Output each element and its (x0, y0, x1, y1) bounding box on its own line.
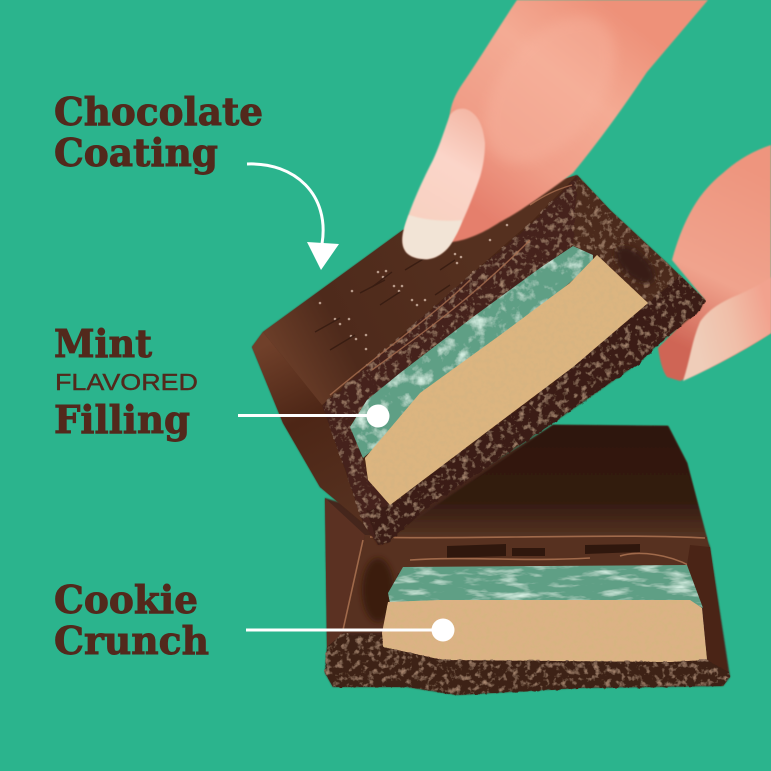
lower bar silhouette (325, 425, 730, 695)
upper bar mint filling (350, 246, 593, 458)
lower bar dark cavities (447, 544, 640, 558)
label: mint flavored filling (54, 321, 198, 442)
pointer: cookie crunch (246, 618, 454, 642)
lower bar side face (325, 498, 365, 647)
label: cookie crunch: Cookie (54, 577, 198, 622)
embossed leaf marks (315, 258, 455, 350)
label: cookie crunch (54, 577, 209, 663)
upper bar right corner (573, 175, 705, 303)
upper bar silhouette (252, 175, 705, 545)
label: cookie crunch: Crunch (54, 618, 209, 663)
nail white tip (403, 215, 462, 259)
upper bar side face (252, 332, 363, 523)
top fingernail (403, 109, 485, 259)
pointer: mint filling (238, 404, 390, 428)
embossed dots pattern (319, 224, 508, 350)
photo: upper chocolate bar (252, 175, 705, 545)
lower bar rim (343, 535, 712, 633)
label: chocolate coating: Coating (54, 130, 218, 175)
upper bar crumb base (366, 275, 705, 545)
lower bar dark left shadow (362, 558, 394, 622)
upper bar rim (322, 175, 610, 423)
label: mint flavored filling: FLAVORED (55, 369, 198, 395)
lower bar top face (365, 425, 707, 538)
label: chocolate coating (54, 89, 263, 175)
lower bar rim highlights (343, 536, 705, 630)
lower bar right coating (687, 545, 728, 677)
arrow: chocolate coating (247, 164, 339, 270)
lower bar crumb base (325, 634, 730, 695)
upper bar cookie layer (365, 255, 648, 505)
label: mint flavored filling: Filling (54, 397, 190, 442)
upper bar rim highlights (330, 185, 572, 395)
upper bar dark corner patch (609, 240, 661, 290)
label: chocolate coating: Chocolate (54, 89, 263, 134)
photo: lower chocolate bar (325, 425, 730, 695)
right fingernail (683, 277, 771, 381)
top finger highlight (458, 0, 642, 188)
label: mint flavored filling: Mint (54, 321, 152, 366)
lower bar mint filling (388, 565, 703, 608)
lower bar cookie layer (382, 600, 707, 662)
photo: hand top finger and nail (403, 0, 708, 259)
photo: hand right finger (658, 145, 771, 381)
upper bar front coating (322, 405, 390, 545)
upper bar top face (263, 175, 577, 405)
